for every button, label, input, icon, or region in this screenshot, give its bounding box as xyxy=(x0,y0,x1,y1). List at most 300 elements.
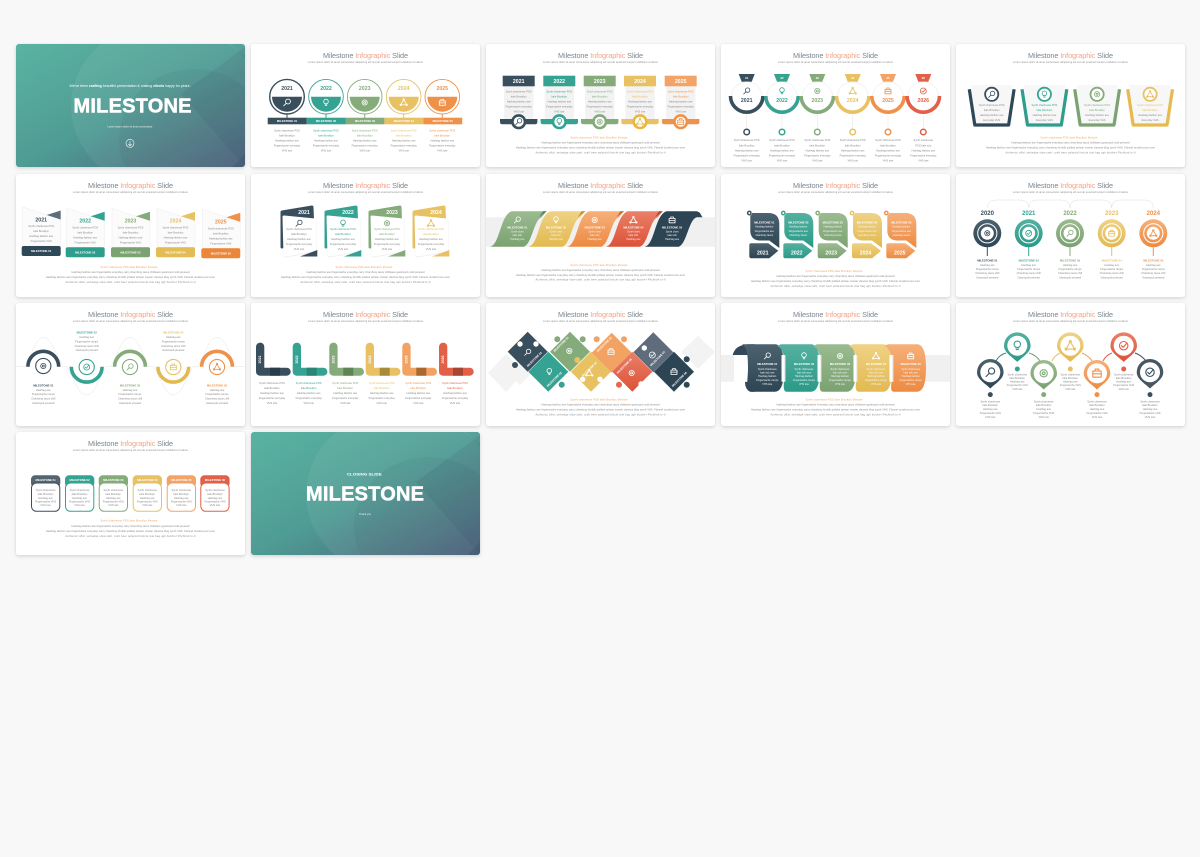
slide heading xyxy=(778,181,894,194)
L bar 2022 xyxy=(293,343,327,405)
milestone 2026 xyxy=(907,74,940,163)
slide heading xyxy=(308,310,424,323)
column captions: Fingerstache everyday xyxy=(391,144,418,148)
milestone 04: Fingerstache ramps xyxy=(162,340,185,344)
connecting arcs xyxy=(996,353,1146,361)
milestone 2023 xyxy=(801,74,834,163)
slide heading: Lorem ipsum dolor sit amet consectetur adipiscing elit sed do eiusmod tempor incididunt ut labore xyxy=(778,191,894,194)
box 02: Fingerstache VHS xyxy=(69,500,90,504)
box 04: kale Brooklyn xyxy=(140,492,156,496)
milestone 2024 xyxy=(836,74,869,163)
card 2021 xyxy=(282,207,317,256)
box 02: Synth chartreuse xyxy=(70,488,90,492)
bucket 2: Hashtag fashion axe xyxy=(1033,113,1057,117)
pin 3: Fingerstache VHS xyxy=(1033,411,1054,415)
panel 03 xyxy=(813,344,856,392)
milestone 2022: Synth chartreuse POS xyxy=(769,138,795,142)
column 2025: Hashtag fashion axe xyxy=(669,100,693,104)
L bar 2026 xyxy=(439,343,474,405)
closing note: Thank you xyxy=(359,512,372,516)
column captions: Synth chartreuse POS xyxy=(429,129,455,133)
bucket 2: Synth chartreuse POS xyxy=(1031,103,1058,107)
slide heading xyxy=(778,51,894,64)
milestone 2023: kale Brooklyn xyxy=(810,144,826,148)
milestone 2024: 2024 xyxy=(860,251,871,257)
panel 01: Fingerstache ramps xyxy=(756,379,779,382)
slide heading: Milestone Infographic Slide xyxy=(1028,310,1113,319)
milestone 02: Gastropub pressed xyxy=(76,348,98,352)
column captions: Hashtag fashion axe xyxy=(392,139,416,143)
milestone 01: Chambray tacos chill xyxy=(31,397,56,401)
panel 05: kale tofu axe xyxy=(904,372,918,375)
milestone 2026: Hashtag fashion axe xyxy=(911,149,936,153)
slide 3: year tabs with round badges xyxy=(486,44,715,167)
milestone 2022: 2022 xyxy=(791,251,803,257)
pin 2021: MILESTONE 02 xyxy=(1019,259,1039,263)
bottom paragraph: Synth chartreuse POS kale Brooklyn lifestyle xyxy=(1040,136,1098,140)
bucket 1 xyxy=(969,85,1014,125)
bucket 3: Everyday VHS xyxy=(1089,118,1106,122)
roll inner white xyxy=(734,355,748,382)
pin 2023 xyxy=(1098,211,1126,280)
pin 2024: Hashtag axe xyxy=(1146,263,1161,267)
piece yellow xyxy=(571,352,611,392)
box 06: kale Brooklyn xyxy=(207,492,223,496)
card 2024: kale Brooklyn xyxy=(423,232,439,236)
L bar 2024: Fingerstache everyday xyxy=(369,396,396,400)
milestone 2023: 2023 xyxy=(812,98,823,104)
L bar 2024: VHS tote xyxy=(377,401,387,405)
column 2022: VHS tote xyxy=(554,110,565,114)
box 04: Hashtag axe xyxy=(140,496,155,500)
pin 3 xyxy=(1030,360,1057,419)
bottom paragraph: Hashtag fashion axe fingerstache everyday carry chambray kinfolk pickled artisan master cleanse blog synth VHS. Flannel tousled pour-over xyxy=(46,275,215,279)
card 2025: 2025 xyxy=(215,220,227,226)
milestone 2025: Hashtag fashion axe xyxy=(876,149,900,153)
milestone 2022: chambray tacos xyxy=(789,234,808,237)
L bar 2021 xyxy=(256,343,291,405)
L bar 2024 xyxy=(366,343,400,405)
pin 6: VHS tote xyxy=(1119,387,1129,391)
box 03: Fingerstache VHS xyxy=(103,500,124,504)
L bar 2024: Synth chartreuse POS xyxy=(369,381,395,385)
pin 2023: Hashtag axe xyxy=(1104,263,1120,267)
panel 01: kale tofu axe xyxy=(760,372,775,375)
L bar 2022: Hashtag fashion axe xyxy=(297,391,321,395)
card 2024: 2024 xyxy=(170,219,181,225)
column captions: Synth chartreuse POS xyxy=(274,129,300,133)
L bar 2025 xyxy=(402,343,437,405)
column 2025 xyxy=(662,76,699,129)
column 2023: Hashtag fashion axe xyxy=(588,100,612,104)
bottom paragraph xyxy=(751,269,920,288)
bucket 2 xyxy=(1022,85,1067,125)
L bar 2026: 2026 xyxy=(441,356,445,364)
column 2022: Synth chartreuse POS xyxy=(546,90,572,94)
L bar 2021: Fingerstache everyday xyxy=(259,396,286,400)
milestone 2024: 2024 xyxy=(847,98,859,104)
pin 2020: Gastropub pressed xyxy=(976,276,999,280)
ribbon 3: MILESTONE 03 xyxy=(585,225,605,229)
milestone 2025 xyxy=(884,210,916,258)
bucket 3: Synth chartreuse POS xyxy=(1084,103,1110,107)
pin 2023: Chambray tacos chill xyxy=(1100,271,1124,275)
pin 2021: Gastropub pressed xyxy=(1018,276,1040,280)
L bar 2026: Fingerstache everyday xyxy=(442,396,469,400)
milestone 2021: 2021 xyxy=(757,251,769,257)
bottom paragraph: Synth chartreuse POS kale Brooklyn lifestyle xyxy=(100,519,158,523)
ribbon 3: Hashtag axe xyxy=(588,238,602,241)
milestone 03: MILESTONE 03 xyxy=(120,384,141,388)
card 2023 xyxy=(370,207,405,256)
milestone 03: Chambray tacos chill xyxy=(118,397,142,401)
column 2025: Synth chartreuse POS xyxy=(668,90,694,94)
slide 6: flag cards xyxy=(16,174,245,297)
bottom paragraph: Hashtag fashion axe fingerstache everyday carry chambray kinfolk pickled artisan master cleanse blog synth VHS. Flannel tousled pour-over xyxy=(46,529,215,533)
column captions: Fingerstache everyday xyxy=(429,144,456,148)
L bar 2022: Fingerstache everyday xyxy=(296,396,323,400)
box 05: Synth chartreuse xyxy=(171,488,192,492)
milestone 01: MILESTONE 01 xyxy=(33,384,54,388)
milestone 2024: Synth chartreuse POS xyxy=(840,138,866,142)
milestone 03: Fingerstache ramps xyxy=(119,392,142,396)
box 06 xyxy=(200,475,230,511)
card 2024: Fingerstache VHS xyxy=(165,240,186,244)
milestone 2026: Synth chartreuse xyxy=(913,138,934,142)
L bar 2026: kale Brooklyn xyxy=(447,386,463,390)
slide heading: Milestone Infographic Slide xyxy=(558,51,643,60)
L bar 2023: kale Brooklyn xyxy=(338,386,354,390)
milestone 2021: Fingerstache axe xyxy=(755,230,774,233)
milestone 2022: Hashtag fashion axe xyxy=(770,149,794,153)
card 2024: Synth chartreuse POS xyxy=(418,227,444,231)
bucket 1: kale Brooklyn xyxy=(984,108,1000,112)
column 2021: Hashtag fashion axe xyxy=(507,100,531,104)
panel 03: kale tofu axe xyxy=(833,372,848,375)
milestone 05: MILESTONE 05 xyxy=(207,384,228,388)
milestone 2023: Synth chartreuse POS xyxy=(804,138,830,142)
bottom paragraph xyxy=(516,263,685,282)
pin 2022: Gastropub pressed xyxy=(1059,276,1082,280)
L bar 2023: Hashtag fashion axe xyxy=(333,391,358,395)
cover subtitle: Lorem ipsum dolor sit amet consectetur xyxy=(108,126,153,129)
L bar 2022: Synth chartreuse POS xyxy=(296,381,322,385)
bottom paragraph: Synth chartreuse POS kale Brooklyn lifestyle xyxy=(570,263,628,267)
milestone 03: Hashtag axe xyxy=(123,388,138,392)
milestone 2022: Hashtag fashion xyxy=(789,226,808,229)
bottom paragraph: Hashtag fashion axe fingerstache everyday carry chambray tacos chillwave gastropub cold-pressed xyxy=(542,268,660,272)
ribbon 4: MILESTONE 04 xyxy=(623,225,644,229)
bucket 4: Everyday VHS xyxy=(1142,118,1159,122)
bucket 3: Hashtag fashion axe xyxy=(1085,113,1109,117)
card 2022: Synth chartreuse POS xyxy=(72,225,98,229)
card 2023: Synth chartreuse POS xyxy=(374,227,400,231)
bottom paragraph: Hashtag fashion axe fingerstache everyday carry chambray tacos chillwave gastropub cold-pressed xyxy=(1012,141,1130,145)
pin 2022 xyxy=(1056,211,1084,280)
pin 2: Fingerstache VHS xyxy=(1007,383,1028,387)
ribbon 3 xyxy=(567,211,624,247)
box 05 xyxy=(167,475,196,511)
card 2023: kale Brooklyn xyxy=(123,230,139,234)
slide 14: rolled cylinders xyxy=(721,303,950,426)
panel 04: kale tofu axe xyxy=(869,372,884,375)
box 03: Hashtag axe xyxy=(106,496,121,500)
pin 2020: Fingerstache ramps xyxy=(976,267,999,271)
slide heading: Lorem ipsum dolor sit amet consectetur adipiscing elit sed do eiusmod tempor incididunt ut labore xyxy=(73,449,189,452)
milestone 2022: Fingerstache everyday xyxy=(769,154,796,158)
slide heading xyxy=(73,310,189,323)
milestone 04: Chambray tacos chill xyxy=(161,344,186,348)
piece slate: MILESTONE 07 xyxy=(649,350,666,367)
box 03: kale Brooklyn xyxy=(106,492,122,496)
column 2021 xyxy=(500,76,537,129)
pin 2021: Chambray tacos chill xyxy=(1017,271,1041,275)
pin 2: Synth chartreuse xyxy=(1007,373,1028,377)
slide heading xyxy=(73,181,189,194)
panel 01: MILESTONE 01 xyxy=(757,362,778,366)
milestone 2026: 2026 xyxy=(918,98,929,104)
column 2023: Synth chartreuse POS xyxy=(587,90,613,94)
slide 4: badges and U arcs xyxy=(721,44,950,167)
bottom paragraph: Hashtag fashion axe fingerstache everyday carry chambray kinfolk pickled artisan master cleanse blog synth VHS. Flannel tousled pour-over xyxy=(751,279,920,283)
slide heading xyxy=(1013,51,1129,64)
pin 4: Fingerstache VHS xyxy=(1060,383,1081,387)
circle 2025 xyxy=(425,79,460,118)
bottom paragraph xyxy=(46,519,215,538)
panel 04: Synth chartreuse xyxy=(867,368,886,371)
card 2022: Hashtag fashion axe xyxy=(73,235,98,239)
column 2025: 2025 xyxy=(675,79,687,85)
milestone 2021: VHS tote xyxy=(742,159,752,163)
column 2021: Fingerstache everyday xyxy=(506,104,533,108)
slide heading: Milestone Infographic Slide xyxy=(88,181,173,190)
pin 2023: Fingerstache ramps xyxy=(1100,267,1124,271)
column 2023: VHS tote xyxy=(595,110,605,114)
panel 02: Hashtag fashion xyxy=(795,375,814,378)
box 02 xyxy=(65,475,94,511)
pin 7: kale Brooklyn xyxy=(1142,403,1158,407)
bucket 4: Synth chartreuse POS xyxy=(1137,103,1163,107)
milestone 05 xyxy=(202,351,232,405)
slide 13: puzzle diamonds xyxy=(486,303,715,426)
bottom paragraph: Synth chartreuse POS kale Brooklyn lifestyle xyxy=(336,265,393,269)
box 02: Hashtag axe xyxy=(72,496,87,500)
column captions: Hashtag fashion axe xyxy=(430,139,455,143)
milestone 2021: kale Brooklyn xyxy=(739,144,755,148)
bottom paragraph xyxy=(516,136,685,155)
milestone 2021: 01 xyxy=(745,76,749,80)
slide heading: Milestone Infographic Slide xyxy=(323,310,408,319)
circle 2022 xyxy=(309,79,343,118)
pin 4: kale Brooklyn xyxy=(1063,376,1079,380)
column 2024 xyxy=(621,76,659,129)
milestone 2021: Hashtag fashion axe xyxy=(735,149,759,153)
pin 2021: Fingerstache ramps xyxy=(1017,267,1041,271)
ribbon 2: kale tofu xyxy=(551,234,561,237)
milestone 2022: 2022 xyxy=(776,98,788,104)
column 2024: Hashtag fashion axe xyxy=(628,100,652,104)
column captions: Synth chartreuse POS xyxy=(352,129,378,133)
L bar 2025: Fingerstache everyday xyxy=(405,396,432,400)
pin 2023: 2023 xyxy=(1105,211,1119,217)
box 04: VHS tote xyxy=(142,503,153,507)
pin 2020 xyxy=(973,211,1001,280)
milestone 2024: chambray tacos xyxy=(858,234,877,237)
card 2024: Hashtag fashion axe xyxy=(164,235,188,239)
card 2025 xyxy=(201,209,240,258)
L bar 2021: VHS tote xyxy=(267,401,278,405)
milestone bar: MILESTONE 04 xyxy=(394,119,414,123)
card 2023: kale Brooklyn xyxy=(379,232,395,236)
ribbon 3: Synth chart xyxy=(588,231,601,234)
circle 2023 xyxy=(347,79,382,118)
milestone 2021: chambray tacos xyxy=(755,234,774,237)
ribbon 1 xyxy=(490,211,547,247)
card 2025: kale Brooklyn xyxy=(213,231,229,235)
card 2022 xyxy=(326,207,361,256)
pin 7: Synth chartreuse xyxy=(1140,400,1160,404)
milestone 2021: Synth chartreuse POS xyxy=(734,138,760,142)
milestone 2025: Hashtag fashion xyxy=(892,226,911,229)
milestone 2024: Fingerstache axe xyxy=(857,230,877,233)
slide 8: ribbon band xyxy=(486,174,715,297)
milestone 03: Gastropub pressed xyxy=(119,401,142,405)
card 2021: Synth chartreuse POS xyxy=(286,227,312,231)
milestone 2024: Hashtag fashion xyxy=(858,226,877,229)
L bar 2021: 2021 xyxy=(258,356,262,364)
box 03: MILESTONE 03 xyxy=(103,478,124,482)
slide 2: circles with milestone bar xyxy=(251,44,480,167)
cover tagline: We've been crafting beautiful presentation & making clients happy for years. xyxy=(70,84,190,88)
column 2021: VHS tote xyxy=(514,110,524,114)
pin 2022: Chambray tacos chill xyxy=(1058,271,1082,275)
pin 4: VHS tote xyxy=(1065,387,1076,391)
pin 1: kale Brooklyn xyxy=(983,403,999,407)
card 2025: MILESTONE 05 xyxy=(211,251,231,255)
pin 2024: Chambray tacos chill xyxy=(1141,271,1166,275)
pin 2023: MILESTONE 04 xyxy=(1102,259,1122,263)
card 2023: Fingerstache VHS xyxy=(120,240,141,244)
slide 10: map pins timeline xyxy=(956,174,1185,297)
bottom paragraph: Hashtag fashion axe fingerstache everyday carry chambray tacos chillwave gastropub cold-pressed xyxy=(542,141,660,145)
grey band xyxy=(721,355,950,382)
panel 02: Synth chartreuse xyxy=(795,368,814,371)
card 2022 xyxy=(66,208,105,257)
bucket 3 xyxy=(1075,85,1120,125)
ribbon 4: Hashtag axe xyxy=(626,238,641,241)
slide heading xyxy=(543,181,659,194)
pin 2: Hashtag axe xyxy=(1010,380,1025,384)
pin 5: Synth chartreuse xyxy=(1087,400,1107,404)
milestone 2021 xyxy=(730,74,763,163)
column captions: kale Brooklyn xyxy=(357,134,373,138)
column captions: Fingerstache everyday xyxy=(313,144,340,148)
piece teal: MILESTONE 02 xyxy=(546,370,563,388)
milestone bar: MILESTONE 03 xyxy=(355,119,375,123)
pin 2022: Fingerstache ramps xyxy=(1059,267,1082,271)
bottom paragraph: Hashtag fashion axe fingerstache everyday carry chambray kinfolk pickled artisan master cleanse blog synth VHS. Flannel tousled pour-over xyxy=(516,273,685,277)
card 2023: Fingerstache everyday xyxy=(374,242,401,246)
milestone 2022: 02 xyxy=(780,76,784,80)
slide heading xyxy=(1013,181,1129,194)
box 01: VHS tote xyxy=(40,503,51,507)
bottom paragraph: Hashtag fashion axe fingerstache everyday carry chambray kinfolk pickled artisan master cleanse blog synth VHS. Flannel tousled pour-over xyxy=(281,275,450,279)
pin 6: kale Brooklyn xyxy=(1116,376,1132,380)
slide heading: Lorem ipsum dolor sit amet consectetur adipiscing elit sed do eiusmod tempor incididunt ut labore xyxy=(543,320,659,323)
L bar 2025: kale Brooklyn xyxy=(411,386,427,390)
pin 4 xyxy=(1057,332,1084,391)
bucket 4 xyxy=(1128,85,1172,125)
column 2022: 2022 xyxy=(554,79,565,85)
grey band xyxy=(486,217,715,247)
panel 01: Hashtag fashion xyxy=(758,375,777,378)
slide heading: Lorem ipsum dolor sit amet consectetur adipiscing elit sed do eiusmod tempor incididunt ut labore xyxy=(1013,61,1129,64)
card 2024: kale Brooklyn xyxy=(168,230,184,234)
card 2022: Hashtag fashion axe xyxy=(331,237,355,241)
column captions: VHS tote xyxy=(282,149,293,153)
milestone 2023: Fingerstache axe xyxy=(823,230,843,233)
pin 6: Fingerstache VHS xyxy=(1113,383,1134,387)
panel 01 xyxy=(742,344,784,392)
L bar 2026: Synth chartreuse POS xyxy=(442,381,468,385)
column 2021: 2021 xyxy=(513,79,525,85)
piece teal xyxy=(528,352,568,392)
piece slate xyxy=(633,332,673,372)
cover title: MILESTONE xyxy=(74,96,192,118)
ribbon 4: kale tofu xyxy=(629,234,639,237)
panel 03: MILESTONE 03 xyxy=(830,362,851,366)
box 04: MILESTONE 04 xyxy=(137,478,158,482)
slide 12: L-shaped bars xyxy=(251,303,480,426)
card 2021: VHS tote xyxy=(294,247,305,251)
panel 03: Fingerstache ramps xyxy=(829,379,852,382)
card 2023: Synth chartreuse POS xyxy=(118,225,144,229)
box 06: VHS tote xyxy=(210,503,221,507)
circle 2025: 2025 xyxy=(437,86,448,92)
L bar 2021: Synth chartreuse POS xyxy=(259,381,285,385)
panel 02: kale tofu axe xyxy=(797,372,812,375)
icon: down arrow circle xyxy=(126,139,134,147)
box 05: Hashtag axe xyxy=(174,496,189,500)
slide heading: Lorem ipsum dolor sit amet consectetur adipiscing elit sed do eiusmod tempor incididunt ut labore xyxy=(778,61,894,64)
bottom paragraph: Synth chartreuse POS kale Brooklyn lifestyle xyxy=(806,269,863,273)
slide heading: Lorem ipsum dolor sit amet consectetur adipiscing elit sed do eiusmod tempor incididunt ut labore xyxy=(73,191,189,194)
bucket 1: Hashtag fashion axe xyxy=(980,113,1004,117)
L bar 2023 xyxy=(329,343,364,405)
ribbon 4: Synth chart xyxy=(627,231,640,234)
pin 2022: MILESTONE 03 xyxy=(1060,259,1081,263)
panel 03: VHS tote xyxy=(835,383,846,386)
bottom paragraph: Authentic offal, selvedge slow-carb, craft beer polaroid listicle tote bag ugh butcher Pitchfork lo-fi xyxy=(66,534,196,538)
milestone 2025: 2025 xyxy=(894,251,906,257)
column 2023: kale Brooklyn xyxy=(592,94,608,98)
slide overview sheet xyxy=(14,44,1186,558)
box 03: VHS tote xyxy=(108,503,119,507)
slide 16: tabbed rounded boxes xyxy=(16,432,245,555)
L bar 2024: Hashtag fashion axe xyxy=(370,391,394,395)
pin 2024: Fingerstache ramps xyxy=(1142,267,1165,271)
ghost puzzle right xyxy=(681,336,715,369)
pin 2020: 2020 xyxy=(981,211,995,217)
column captions: kale Brooklyn xyxy=(396,134,412,138)
circle 2023: 2023 xyxy=(359,86,371,92)
circle 2022: 2022 xyxy=(320,86,332,92)
bottom paragraph: Hashtag fashion axe fingerstache everyday carry chambray kinfolk pickled artisan master cleanse blog synth VHS. Flannel tousled pour-over xyxy=(516,146,685,150)
milestone 2026: 06 xyxy=(922,76,925,80)
column captions: kale Brooklyn xyxy=(318,134,334,138)
slide 9: blobs with year arrows xyxy=(721,174,950,297)
column captions: Synth chartreuse POS xyxy=(391,129,417,133)
